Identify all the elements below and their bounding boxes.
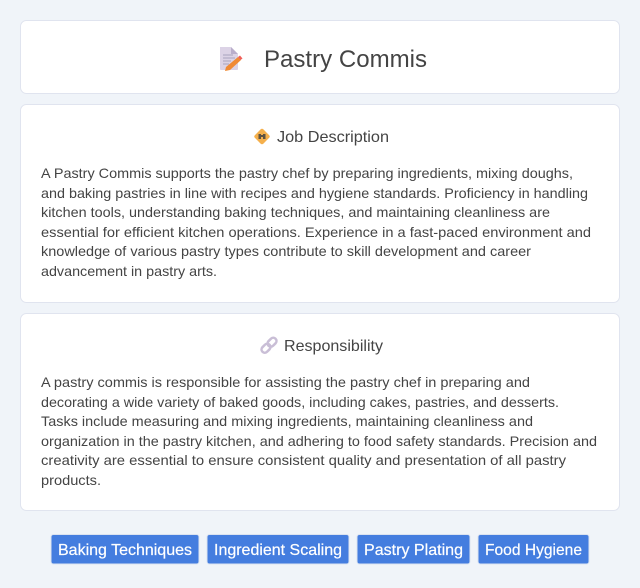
text block: job description (41, 165, 591, 279)
tag: food hygiene: Food Hygiene (485, 542, 582, 559)
panel: responsibility (20, 314, 620, 510)
text block: responsibility: products. (41, 472, 101, 488)
icon: document with pencil (220, 47, 242, 71)
icon: chain link (260, 336, 278, 354)
tag: ingredient scaling: Ingredient Scaling (214, 542, 342, 559)
text block: responsibility: A pastry commis is responsible for assisting the pastry chef in preparing and (41, 374, 530, 390)
heading: job description: Job Description (277, 129, 389, 146)
text block: job description: advancement in pastry arts. (41, 263, 217, 279)
tag: ingredient scaling (207, 534, 349, 564)
title text: Pastry Commis (264, 46, 427, 73)
text block: responsibility: creativity are essential to ensure consistent quality and presentation of all pastry (41, 452, 566, 468)
tag: pastry plating: Pastry Plating (364, 542, 463, 559)
text block: responsibility: decorating a wide variety of baked goods, including cakes, pastries, and desserts. (41, 394, 559, 410)
panel: job description (20, 104, 620, 302)
tags row (51, 534, 589, 564)
heading: responsibility: Responsibility (284, 338, 383, 355)
tag: food hygiene (478, 534, 589, 564)
text block: job description: knowledge of various pastry types contribute to skill development and career (41, 243, 531, 259)
text block: job description: kitchen tools, understanding baking techniques, and maintaining cleanliness are (41, 204, 550, 220)
tag: baking techniques: Baking Techniques (58, 542, 192, 559)
text block: job description: A Pastry Commis supports the pastry chef by preparing ingredients, mixing doughs, (41, 165, 573, 181)
tag: pastry plating (357, 534, 470, 564)
panel: title (20, 20, 620, 94)
text block: job description: essential for efficient kitchen operations. Experience in a fast-paced environment and (41, 224, 591, 240)
text block: responsibility: organization in the pastry kitchen, and adhering to food safety standards. Precision and (41, 433, 597, 449)
text block: responsibility (41, 374, 597, 488)
tag: baking techniques (51, 534, 199, 564)
text block: responsibility: Tasks include measuring and mixing ingredients, maintaining cleanliness and (41, 413, 533, 429)
icon: diamond sign (254, 128, 270, 145)
text block: job description: and baking pastries in line with recipes and hygiene standards. Proficiency in handling (41, 185, 588, 201)
